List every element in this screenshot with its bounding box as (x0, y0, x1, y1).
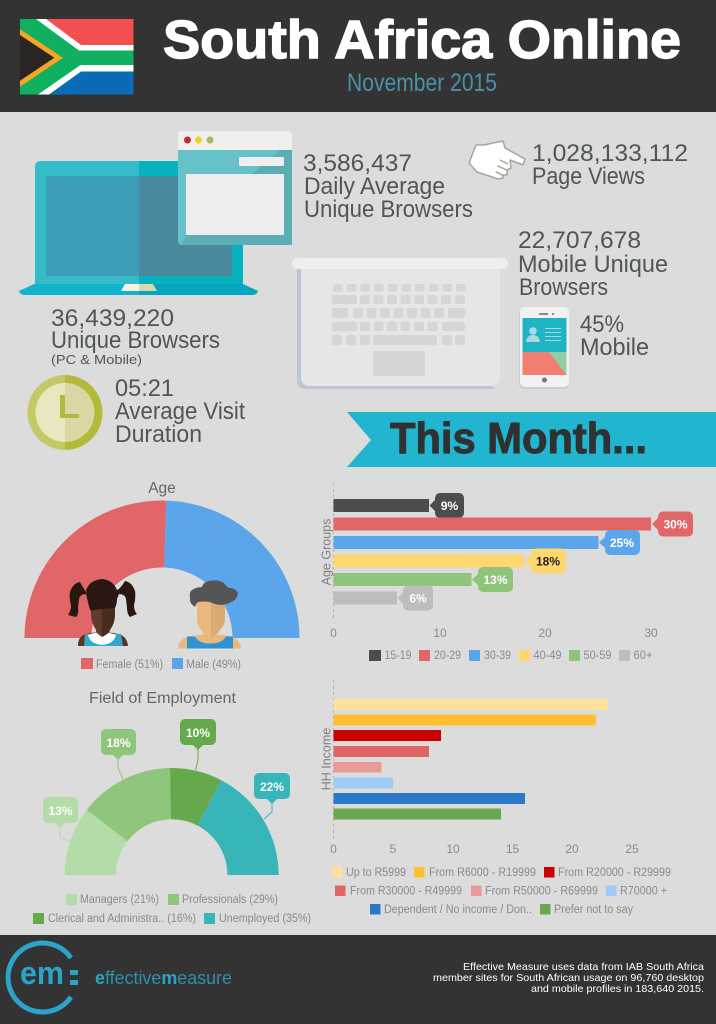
axis ticks (330, 626, 658, 640)
stat: unique browsers: 36,439,220 (51, 305, 174, 332)
stat: unique browsers: Unique Browsers (51, 327, 220, 354)
bar: 40-49 (334, 548, 566, 574)
bar: 15-19 (334, 493, 464, 518)
slice: clerical and administrative (170, 768, 221, 826)
legend: age groups: 15-19 (384, 650, 412, 662)
stat: average visit duration: Average Visit (115, 398, 245, 425)
legend: income: Dependent / No income / Don.. (384, 904, 532, 916)
stat: average visit duration (115, 375, 245, 448)
stat: 45% mobile: Mobile (580, 334, 649, 361)
bar: 50-59: 13% (483, 573, 508, 587)
bar: 60+ (334, 586, 433, 610)
stat: page views: 1,028,133,112 (532, 140, 688, 167)
chart title: field of employment: Field of Employment (89, 690, 237, 707)
slice: female (24, 501, 166, 638)
stat: average visit duration: 05:21 (115, 375, 174, 402)
income bars (334, 699, 608, 820)
stat: mobile unique browsers: Browsers (519, 274, 608, 301)
legend: income: R70000 + (620, 886, 667, 898)
bar: 20-29 (334, 512, 693, 536)
stat: 45% mobile: 45% (580, 311, 624, 338)
legend: employment: Clerical and Administra.. (16%) (48, 913, 196, 925)
legend: employment: Managers (21%) (80, 894, 159, 906)
axis ticks: 20 (538, 626, 552, 640)
callout: clerical 10% (180, 719, 216, 770)
source note (433, 961, 704, 995)
bar: 15-19: 9% (441, 499, 459, 513)
stat: mobile unique browsers: 22,707,678 (518, 227, 641, 254)
legend: employment: Unemployed (35%) (219, 913, 311, 925)
chart: field of employment semi-donut (33, 690, 311, 925)
callout: managers 13% (43, 797, 78, 841)
legend: employment: Professionals (29%) (182, 894, 278, 906)
axis title: hh income: HH Income (320, 728, 334, 790)
axis ticks: 20 (565, 842, 579, 856)
icon: boy (178, 580, 241, 648)
source note: Effective Measure uses data from IAB South Africa (463, 961, 704, 973)
stat: unique browsers (51, 305, 220, 367)
legend: employment (33, 894, 311, 925)
chart: age groups bars (320, 483, 693, 662)
legend: income: Up to R5999 (346, 867, 406, 879)
legend: gender: Male (49%) (186, 659, 241, 671)
icon: smartphone (519, 307, 569, 389)
axis ticks: 0 (330, 626, 337, 640)
stat: page views (532, 140, 688, 190)
icon: South African flag (20, 19, 134, 94)
legend: income: From R6000 - R19999 (429, 867, 536, 879)
footer band (0, 935, 716, 1024)
icon: browser window (178, 131, 292, 245)
title: South Africa Online (163, 10, 681, 70)
header band (0, 0, 716, 112)
stat: average visit duration: Duration (115, 421, 202, 448)
icon: laptop (19, 161, 258, 295)
icon: girl (68, 579, 137, 646)
source note: member sites for South African usage on 96,760 desktop (433, 972, 704, 984)
bar: 50-59 (334, 567, 513, 592)
callout: clerical 10%: 10% (186, 726, 210, 740)
callout: unemployed 22% (254, 773, 290, 819)
subtitle date: November 2015 (347, 69, 497, 97)
axis ticks: 30 (644, 626, 658, 640)
legend: age groups: 20-29 (434, 650, 461, 662)
logo wordmark: effectivemeasure (95, 968, 232, 988)
stat: daily average unique browsers: Unique Browsers (304, 196, 473, 223)
legend: income: Prefer not to say (554, 904, 633, 916)
axis ticks: 10 (433, 626, 447, 640)
stat: unique browsers: (PC & Mobile) (51, 352, 142, 367)
slice: unemployed (198, 780, 279, 875)
axis ticks: 5 (390, 842, 397, 856)
stat: daily average unique browsers: 3,586,437 (303, 150, 412, 177)
bar: 20-29: 30% (663, 518, 688, 532)
slice: professionals (87, 768, 171, 841)
icon: clock (28, 375, 102, 450)
axis ticks: 15 (506, 842, 519, 856)
axis ticks: 10 (446, 842, 460, 856)
stat: 45% mobile (580, 311, 649, 361)
stat: mobile unique browsers: Mobile Unique (518, 251, 668, 278)
legend: age groups (369, 650, 653, 662)
logo: effective measure mark: em (20, 955, 64, 991)
legend: income (332, 867, 671, 916)
slice: male (164, 501, 300, 638)
logo: effective measure mark (8, 943, 78, 1012)
callout: professionals 18% (101, 729, 136, 779)
stat: mobile unique browsers (518, 227, 668, 301)
axis ticks (330, 842, 639, 856)
bar: 30-39: 25% (610, 536, 634, 550)
axis title: age groups: Age Groups (320, 519, 334, 585)
chart: age gender semi-donut (24, 480, 300, 671)
legend: age groups: 60+ (634, 650, 653, 662)
chart title: age: Age (148, 480, 176, 497)
bar: 40-49: 18% (536, 554, 560, 568)
legend: income: From R50000 - R69999 (485, 886, 598, 898)
slice: managers (65, 810, 128, 875)
banner: this month: This Month... (390, 414, 647, 463)
legend: gender (81, 658, 241, 671)
icon: pointing hand cursor (469, 141, 525, 179)
legend: income: From R30000 - R49999 (350, 886, 462, 898)
callout: unemployed 22%: 22% (260, 780, 284, 794)
stat: daily average unique browsers (303, 150, 473, 223)
axis ticks: 0 (330, 842, 337, 856)
legend: gender: Female (51%) (96, 659, 163, 671)
axis ticks: 25 (625, 842, 639, 856)
callout: managers 13%: 13% (48, 804, 73, 818)
legend: age groups: 30-39 (484, 650, 511, 662)
callout: professionals 18%: 18% (106, 736, 131, 750)
legend: age groups: 40-49 (534, 650, 562, 662)
legend: income: From R20000 - R29999 (558, 867, 671, 879)
icon: laptop keyboard (292, 258, 508, 389)
chart: household income bars (320, 680, 671, 916)
legend: age groups: 50-59 (584, 650, 612, 662)
bar: 60+: 6% (409, 592, 427, 606)
bar: 30-39 (334, 530, 640, 555)
source note: and mobile profiles in 183,640 2015. (531, 983, 704, 995)
stat: page views: Page Views (532, 163, 645, 190)
stat: daily average unique browsers: Daily Average (304, 173, 445, 200)
banner: this month (347, 412, 716, 467)
